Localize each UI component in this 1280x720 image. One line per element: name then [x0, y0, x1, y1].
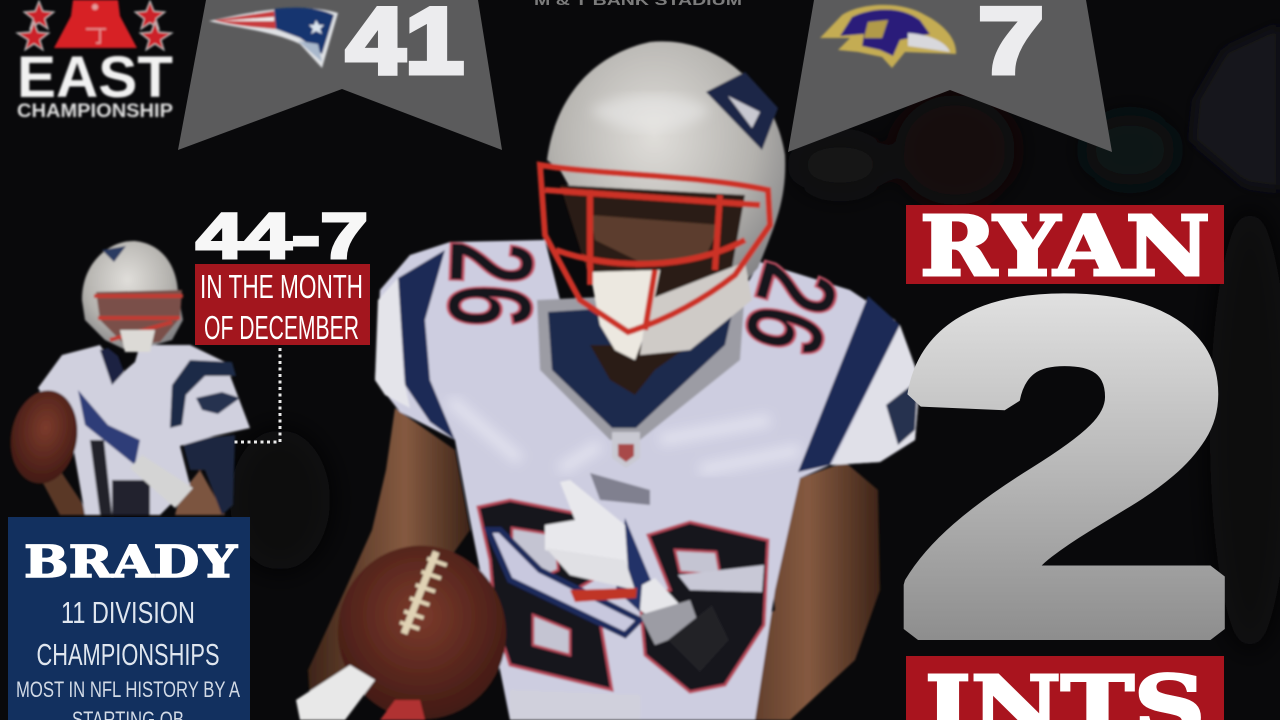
facemask: [540, 165, 770, 332]
sleeve stripes: [398, 250, 455, 440]
face: [560, 185, 745, 330]
ghost helmet, right edge: [1192, 25, 1280, 190]
panel: Ryan red label: [906, 199, 1224, 295]
lower jersey band: [678, 565, 764, 592]
helmet shell: [547, 41, 785, 310]
icon: Patriots logo: [209, 8, 338, 68]
label: EAST: EAST: [17, 45, 173, 110]
heading: BRADY: BRADY: [24, 537, 238, 588]
icon: AFC red A: [54, 0, 137, 48]
line: championships: CHAMPIONSHIPS: [36, 637, 220, 672]
stat: 44-7: [195, 200, 370, 346]
NFL shield: [612, 432, 640, 468]
jersey front numbers: [478, 500, 768, 692]
ball: [3, 385, 85, 489]
glove: [545, 480, 700, 645]
heading: RYAN: RYAN: [920, 199, 1210, 295]
red caption box: [195, 264, 370, 345]
label: CHAMPIONSHIP: CHAMPIONSHIP: [17, 101, 173, 122]
number: 44-7: 44-7: [196, 200, 368, 272]
Brady photo illustration: [3, 241, 250, 515]
shoulder number, right: 26: [719, 251, 863, 369]
icon: Ravens logo: [820, 5, 956, 68]
stat: big number 2: 2: [897, 208, 1235, 720]
caption line 2: OF DECEMBER: [204, 309, 359, 346]
left arm: [308, 408, 470, 700]
panel: INTs red label: [906, 656, 1224, 720]
jersey body: [375, 240, 920, 720]
glove and wrist tape: [78, 390, 140, 465]
jersey: [38, 345, 250, 515]
ribbon: Ravens score: [788, 0, 1112, 152]
AFC East Championship logo: [17, 0, 173, 122]
dotted connector: [232, 348, 280, 442]
helmet: [82, 241, 183, 352]
collar: [537, 290, 745, 440]
ribbon: Patriots score: [178, 0, 502, 150]
line: most in NFL history: MOST IN NFL HISTORY BY A: [16, 677, 240, 702]
jersey folds: [450, 400, 800, 470]
right arm: [700, 462, 880, 720]
football: [324, 532, 520, 720]
forearm sleeve: [488, 530, 640, 635]
icon: AFC stars: [17, 1, 172, 50]
panel: Brady stat box: [8, 517, 250, 720]
hand on ball: [296, 665, 375, 720]
laces: [391, 552, 449, 634]
caption line 1: IN THE MONTH: [200, 268, 363, 305]
main player illustration: [296, 41, 920, 720]
sleeve caps: [375, 278, 410, 408]
shoulder number, left: 26: [422, 239, 559, 330]
mouth guard and chin strap: [590, 270, 660, 360]
wrist band: [668, 605, 729, 672]
arm and skin: [36, 470, 90, 515]
number: [112, 480, 150, 515]
line: 11 division: 11 DIVISION: [61, 595, 195, 630]
helmet logo: [706, 72, 778, 150]
jersey number windows: [512, 528, 720, 655]
Reebok-style chest mark: [590, 473, 650, 505]
